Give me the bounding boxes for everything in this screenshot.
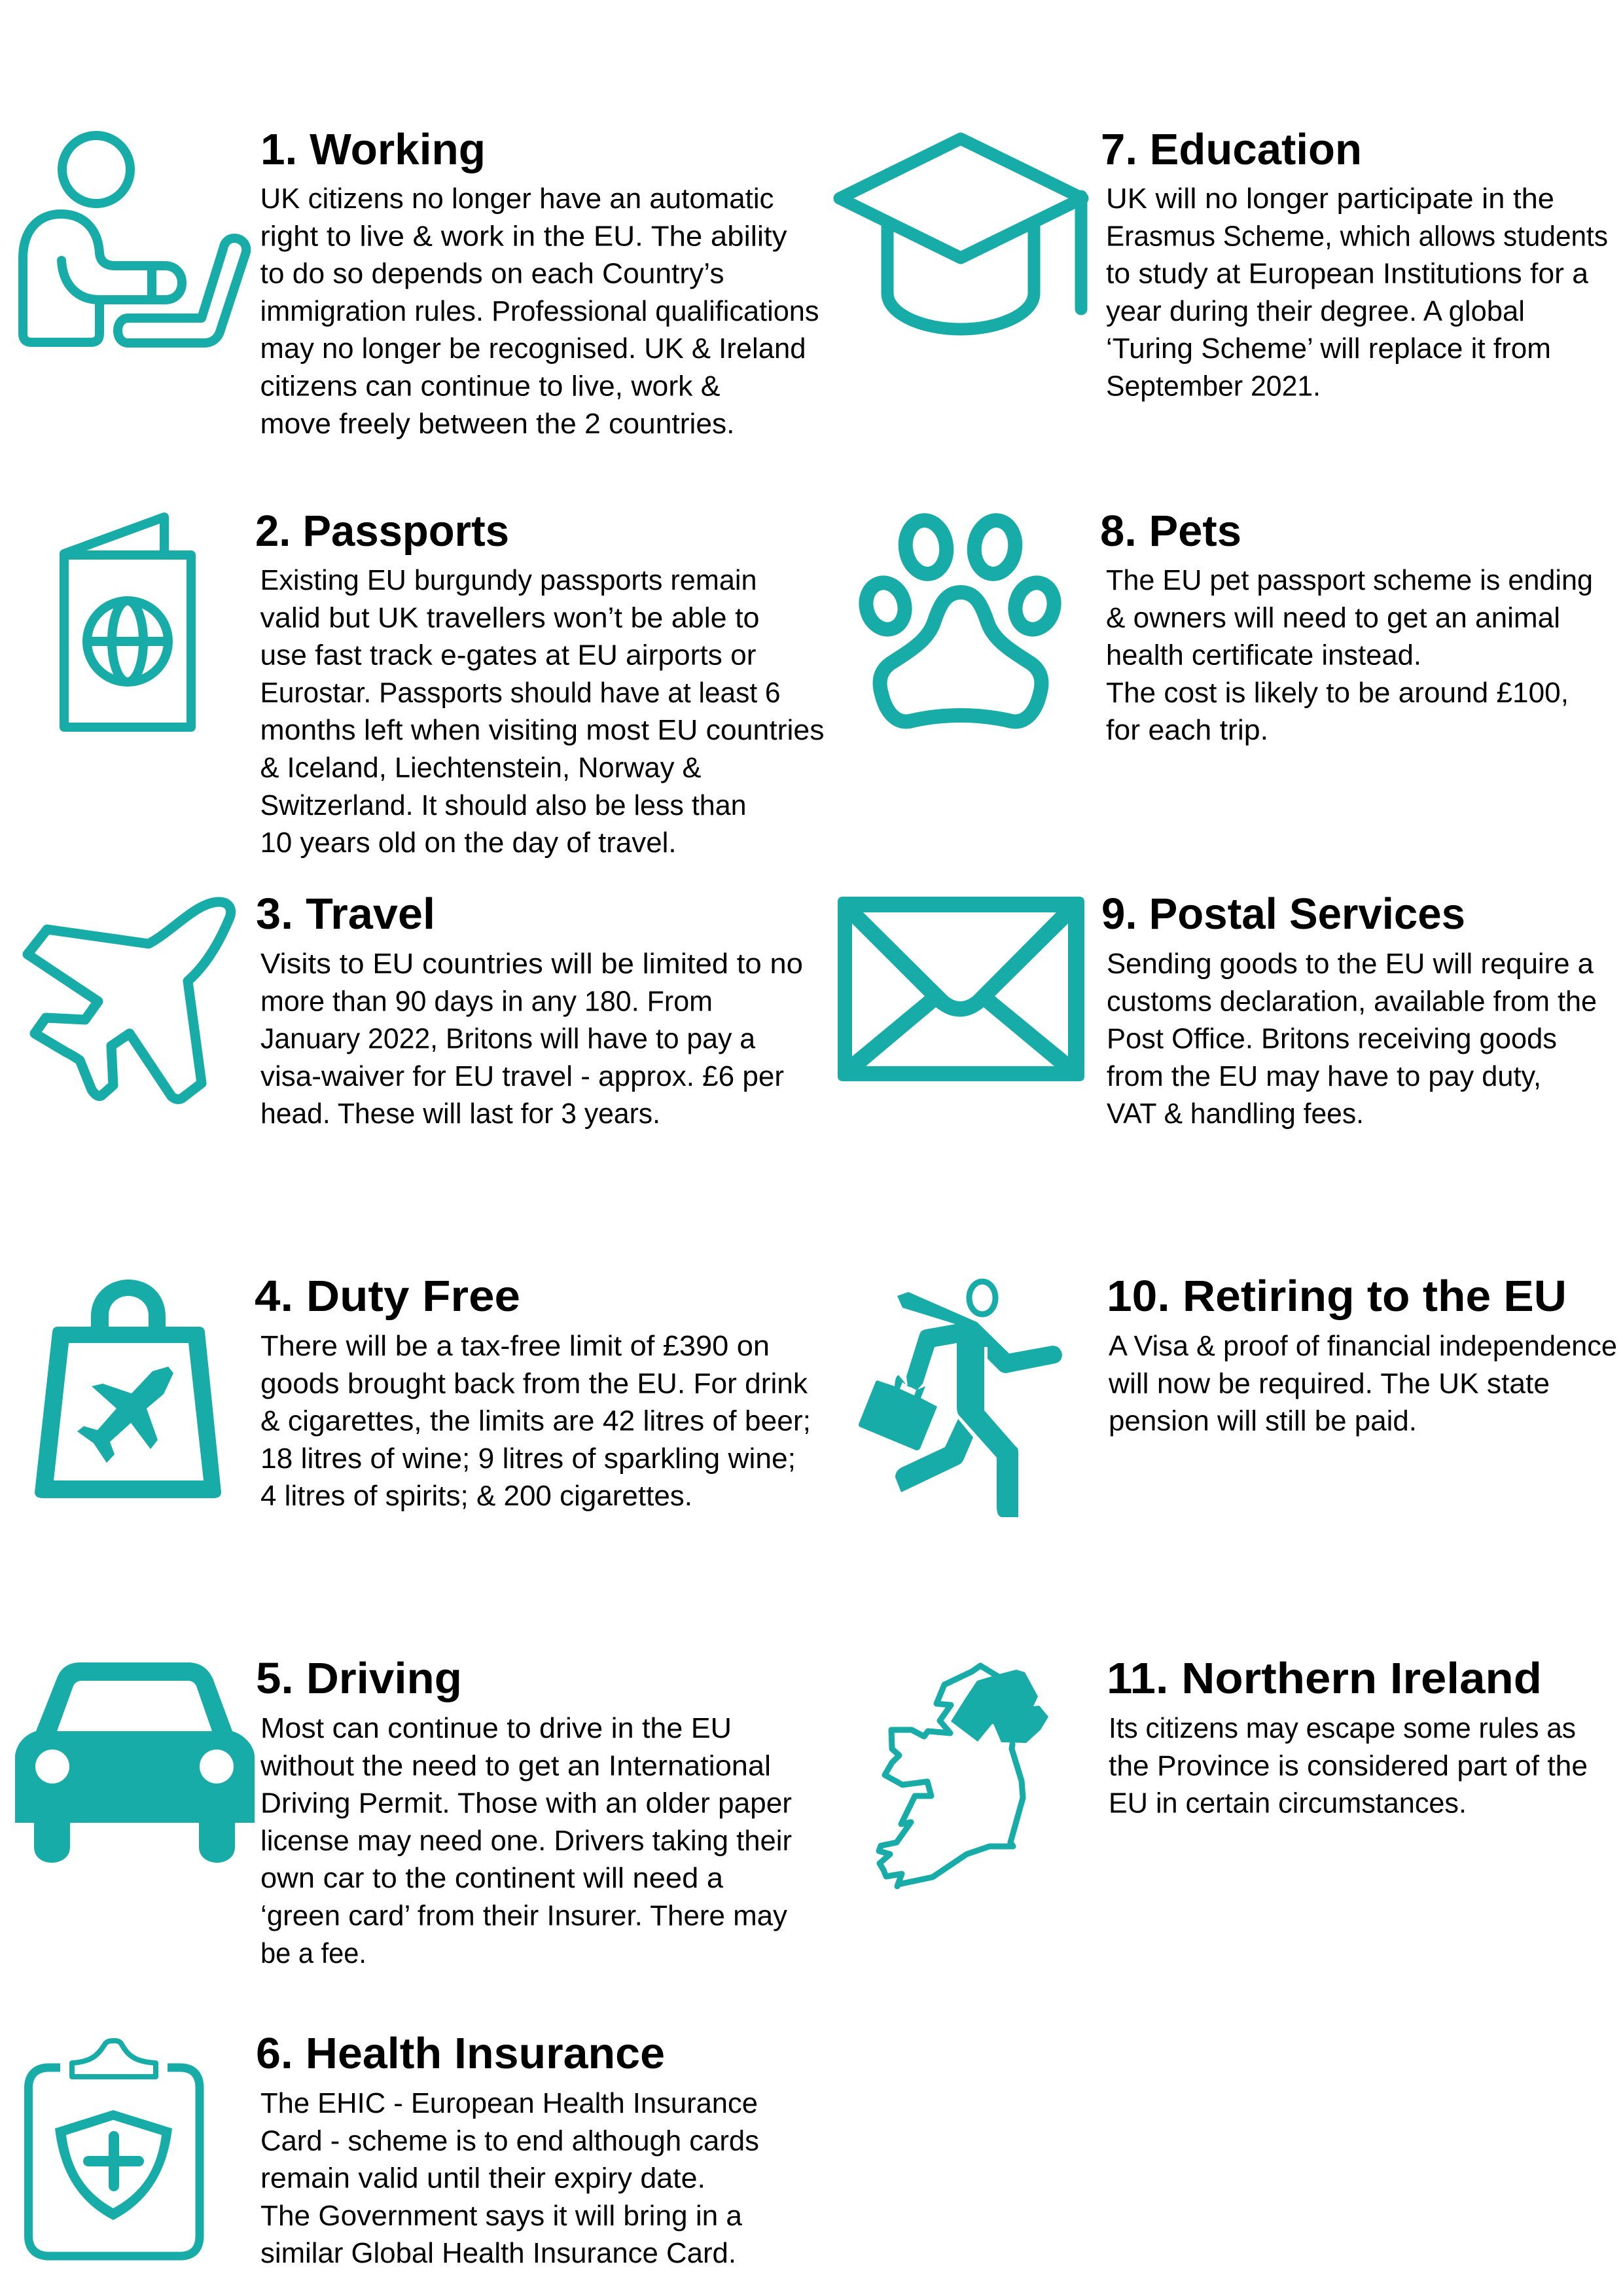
panel: 3. Travel bbox=[27, 889, 803, 1130]
text block: pets: The EU pet passport scheme is ending bbox=[1106, 564, 1593, 596]
text block: postal services bbox=[1107, 948, 1597, 1130]
text block: travel: more than 90 days in any 180. From bbox=[260, 985, 713, 1017]
text block: duty free: 4 litres of spirits; & 200 cigarettes. bbox=[260, 1480, 692, 1512]
icon: clipboard with medical shield bbox=[29, 2041, 200, 2256]
text block: postal services: Post Office. Britons receiving goods bbox=[1107, 1023, 1557, 1055]
text block: pets bbox=[1106, 564, 1593, 746]
panel: 5. Driving bbox=[15, 1654, 792, 1969]
text block: education: September 2021. bbox=[1106, 370, 1321, 402]
panel: 4. Duty Free bbox=[35, 1272, 811, 1512]
heading: 10. Retiring to the EU: 10. Retiring to the EU bbox=[1107, 1272, 1567, 1321]
text block: passports: valid but UK travellers won’t be able to bbox=[260, 601, 759, 634]
text block: working: citizens can continue to live, work & bbox=[260, 370, 720, 402]
text block: postal services: from the EU may have to pay duty, bbox=[1107, 1060, 1541, 1092]
text block: postal services: customs declaration, available from the bbox=[1107, 985, 1597, 1017]
text block: travel bbox=[260, 948, 803, 1130]
text block: passports bbox=[260, 564, 825, 859]
text block: driving: license may need one. Drivers taking their bbox=[260, 1825, 792, 1857]
icon: plane outline bbox=[27, 902, 231, 1099]
panel: 6. Health Insurance bbox=[29, 2029, 759, 2269]
text block: retiring: A Visa & proof of financial independence bbox=[1109, 1330, 1617, 1362]
heading: 4. Duty Free: 4. Duty Free bbox=[255, 1272, 520, 1321]
heading: 3. Travel: 3. Travel bbox=[256, 889, 435, 939]
text block: working: immigration rules. Professional qualifications bbox=[260, 295, 819, 327]
icon: person at laptop bbox=[23, 135, 246, 343]
text block: passports: Existing EU burgundy passports remain bbox=[260, 564, 757, 596]
icon: graduation cap bbox=[840, 139, 1082, 329]
text block: duty free: There will be a tax-free limit of £390 on bbox=[260, 1330, 770, 1362]
text block: education: year during their degree. A global bbox=[1106, 295, 1525, 327]
text block: passports: use fast track e-gates at EU airports or bbox=[260, 639, 757, 672]
panel: 1. Working bbox=[23, 125, 819, 440]
text block: retiring: will now be required. The UK state bbox=[1108, 1367, 1550, 1399]
panel: 9. Postal Services bbox=[838, 889, 1597, 1130]
heading: 5. Driving: 5. Driving bbox=[256, 1654, 462, 1703]
text block: health insurance: The Government says it will bring in a bbox=[260, 2200, 743, 2232]
text block: duty free: goods brought back from the EU. For drink bbox=[260, 1367, 808, 1399]
heading: 2. Passports: 2. Passports bbox=[255, 507, 509, 556]
text block: health insurance bbox=[260, 2087, 759, 2269]
text block: education: to study at European Institutions for a bbox=[1106, 258, 1589, 290]
text block: education: ‘Turing Scheme’ will replace it from bbox=[1106, 332, 1551, 365]
icon: passport bbox=[64, 517, 191, 727]
text block: health insurance: The EHIC - European Health Insurance bbox=[260, 2087, 758, 2119]
text block: education: Erasmus Scheme, which allows students bbox=[1106, 220, 1608, 252]
text block: passports: Eurostar. Passports should have at least 6 bbox=[260, 677, 780, 709]
text block: duty free bbox=[260, 1330, 811, 1512]
text block: northern ireland: EU in certain circumstances. bbox=[1109, 1787, 1467, 1820]
text block: travel: head. These will last for 3 years. bbox=[260, 1098, 660, 1130]
text block: working bbox=[260, 183, 819, 440]
heading: 9. Postal Services: 9. Postal Services bbox=[1101, 889, 1465, 939]
text block: pets: The cost is likely to be around £100, bbox=[1106, 677, 1569, 709]
panel: 10. Retiring to the EU bbox=[859, 1272, 1617, 1517]
text block: travel: Visits to EU countries will be limited to no bbox=[260, 948, 803, 980]
text block: duty free: 18 litres of wine; 9 litres of sparkling wine; bbox=[260, 1443, 796, 1475]
text block: pets: health certificate instead. bbox=[1106, 639, 1421, 672]
text block: duty free: & cigarettes, the limits are 42 litres of beer; bbox=[260, 1405, 811, 1437]
text block: retiring bbox=[1108, 1330, 1617, 1437]
text block: driving bbox=[260, 1712, 792, 1969]
text block: travel: visa-waiver for EU travel - approx. £6 per bbox=[260, 1060, 784, 1092]
text block: driving: without the need to get an International bbox=[260, 1749, 771, 1782]
text block: retiring: pension will still be paid. bbox=[1109, 1405, 1417, 1437]
text block: northern ireland: Its citizens may escape some rules as bbox=[1109, 1712, 1576, 1744]
panel: 8. Pets bbox=[861, 507, 1593, 746]
icon: paw print bbox=[861, 518, 1059, 722]
heading: 11. Northern Ireland: 11. Northern Ireland bbox=[1107, 1654, 1542, 1703]
text block: driving: own car to the continent will need a bbox=[260, 1862, 724, 1894]
text block: postal services: VAT & handling fees. bbox=[1107, 1098, 1364, 1130]
text block: working: UK citizens no longer have an automatic bbox=[260, 183, 774, 215]
text block: northern ireland: the Province is considered part of the bbox=[1109, 1749, 1588, 1782]
text block: health insurance: remain valid until their expiry date. bbox=[260, 2162, 705, 2195]
icon: envelope bbox=[838, 897, 1084, 1081]
text block: working: may no longer be recognised. UK & Ireland bbox=[260, 332, 806, 365]
text block: driving: Driving Permit. Those with an older paper bbox=[260, 1787, 792, 1820]
text block: passports: 10 years old on the day of travel. bbox=[260, 827, 677, 859]
text block: travel: January 2022, Britons will have to pay a bbox=[260, 1023, 756, 1055]
icon: running man with briefcase bbox=[859, 1282, 1062, 1517]
text block: driving: Most can continue to drive in the EU bbox=[260, 1712, 732, 1744]
heading: 1. Working: 1. Working bbox=[260, 125, 486, 174]
text block: passports: & Iceland, Liechtenstein, Norway & bbox=[260, 751, 702, 784]
icon: car front bbox=[15, 1662, 255, 1863]
panel: 2. Passports bbox=[64, 507, 825, 859]
icon: shopping bag with plane bbox=[35, 1280, 221, 1498]
text block: northern ireland bbox=[1109, 1712, 1588, 1820]
text block: driving: be a fee. bbox=[260, 1937, 366, 1969]
text block: passports: months left when visiting most EU countries bbox=[260, 714, 825, 746]
text block: working: to do so depends on each Country’s bbox=[260, 258, 724, 290]
text block: passports: Switzerland. It should also be less than bbox=[260, 789, 746, 821]
text block: health insurance: similar Global Health Insurance Card. bbox=[260, 2237, 736, 2269]
heading: 7. Education: 7. Education bbox=[1101, 125, 1362, 174]
text block: pets: for each trip. bbox=[1106, 714, 1268, 746]
text block: working: right to live & work in the EU. The ability bbox=[260, 220, 787, 252]
text block: driving: ‘green card’ from their Insurer. There may bbox=[260, 1899, 787, 1932]
panel: 7. Education bbox=[840, 125, 1608, 402]
text block: education bbox=[1106, 183, 1608, 402]
panel: 11. Northern Ireland bbox=[879, 1654, 1588, 1886]
text block: health insurance: Card - scheme is to end although cards bbox=[260, 2125, 759, 2157]
text block: postal services: Sending goods to the EU will require a bbox=[1107, 948, 1594, 980]
icon: map of Ireland with Northern Ireland filled bbox=[879, 1666, 1048, 1886]
text block: working: move freely between the 2 countries. bbox=[260, 408, 734, 440]
heading: 8. Pets: 8. Pets bbox=[1100, 507, 1241, 556]
text block: education: UK will no longer participate in the bbox=[1106, 183, 1554, 215]
heading: 6. Health Insurance: 6. Health Insurance bbox=[256, 2029, 665, 2078]
text block: pets: & owners will need to get an animal bbox=[1106, 601, 1560, 634]
